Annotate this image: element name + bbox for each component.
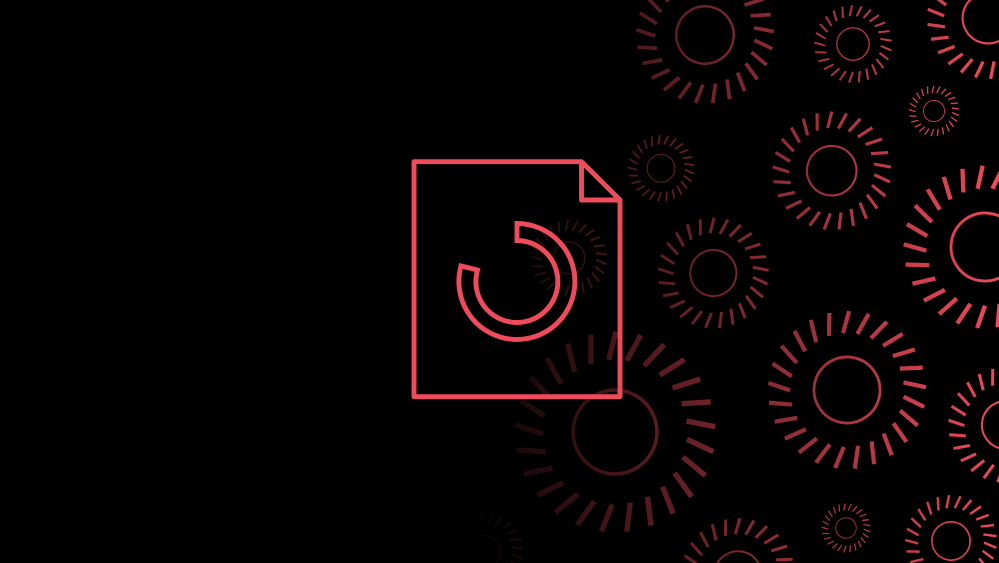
ring: top small: [810, 1, 896, 87]
ring: largest faded: [500, 317, 730, 547]
ring: right edge lower: [939, 359, 999, 492]
ring: bottom faint: [440, 508, 529, 563]
ring: small beside document: [624, 131, 698, 205]
document outline: [414, 162, 620, 397]
icon: document with progress arc: [414, 162, 620, 397]
ring: lower right large: [755, 298, 939, 482]
ring: upper middle: [764, 103, 899, 238]
ring: top centre: [626, 0, 784, 114]
ring: bottom tiny: [819, 501, 873, 555]
ring: behind document: [527, 216, 611, 300]
ring: middle: [650, 209, 777, 337]
folded corner: [582, 162, 620, 200]
progress arc: [459, 224, 575, 339]
ring: bottom centre cut off: [672, 509, 804, 563]
ring: bottom right: [901, 491, 999, 563]
ring: top right corner: [915, 0, 999, 91]
ring: tiny upper right: [905, 82, 963, 140]
ring: right large: [894, 157, 999, 338]
